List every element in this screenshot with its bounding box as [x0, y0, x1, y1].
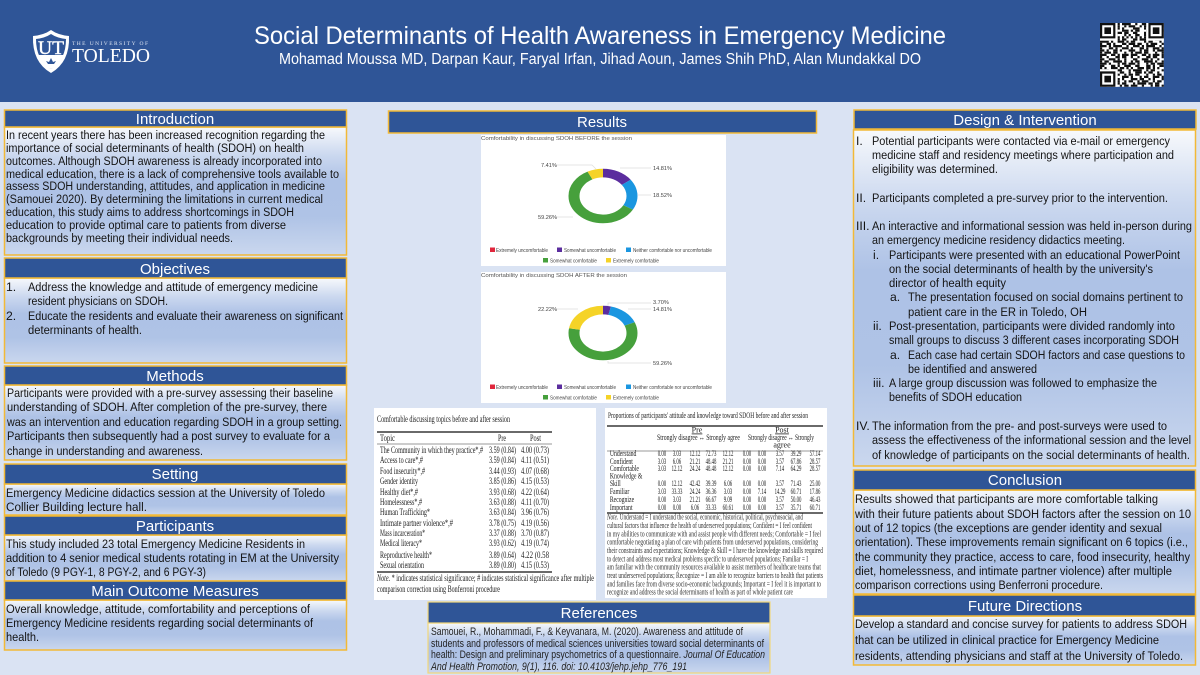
heading: references: References	[561, 605, 637, 622]
text: design and intervention: I.	[856, 134, 863, 148]
table: attitude and knowledge proportions: 36.36	[706, 488, 717, 496]
table: attitude and knowledge proportions: 28.57	[810, 465, 821, 473]
table: comfortable discussing topics: The Community in which they practice*,#	[380, 446, 483, 456]
table: attitude and knowledge proportions: Skill	[610, 479, 621, 488]
text: design and intervention: a.	[890, 290, 900, 304]
table: comfortable discussing topics: Healthy diet*,#	[380, 488, 418, 498]
table: comfortable discussing topics: 3.85 (0.86)	[489, 476, 516, 487]
table: comfortable discussing topics: 3.63 (0.84)	[489, 507, 516, 518]
chart: comfortability after session	[481, 272, 726, 403]
text: introduction	[6, 128, 339, 245]
table: attitude and knowledge proportions: Important	[610, 503, 633, 512]
table: attitude and knowledge proportions: Strongly disagree ↔ Strongly	[748, 433, 814, 442]
table note: recognize and address the social determinants of health as part of whole patient care	[607, 588, 793, 596]
text: conclusion: diet, homelessness, and intimate partner violence) after multiple	[855, 564, 1172, 578]
table: attitude and knowledge proportions: Confident	[610, 457, 633, 466]
table: comfortable discussing topics: Access to care*,#	[380, 456, 423, 466]
text: participants: This study included 23 total Emergency Medicine Residents in	[6, 537, 305, 551]
table: attitude and knowledge proportions: 0.00	[673, 504, 682, 512]
legend: before: Somewhat comfortable	[550, 258, 597, 264]
table: attitude and knowledge proportions: 12.12	[723, 465, 733, 473]
table: comfortable discussing topics: 3.63 (0.88)	[489, 497, 516, 508]
heading: setting: Setting	[152, 466, 198, 483]
text: design and intervention: benefits of SDOH education	[889, 390, 1022, 404]
text: design and intervention: director of health equity	[889, 276, 1007, 290]
table: attitude and knowledge proportions: 21.21	[690, 458, 700, 466]
table: comfortable discussing topics: Post	[530, 434, 541, 444]
heading: future directions: Future Directions	[968, 598, 1082, 615]
table: attitude and knowledge proportions: 0.00	[743, 450, 752, 458]
table note: comfortable negotiating a plan of care with patients from underserved populations, considering	[607, 538, 818, 546]
table: attitude and knowledge proportions: 60.61	[723, 504, 733, 512]
heading: conclusion: Conclusion	[988, 472, 1062, 489]
text: introduction: (Samouei 2020). By determining the limitations in current medical	[6, 192, 323, 206]
text: introduction: education to provide optimal care to patients from diverse	[6, 218, 286, 232]
chart: comfortability after session: Comfortability in discussing SDOH AFTER the session	[481, 273, 627, 279]
table: attitude and knowledge proportions: Understand	[610, 449, 637, 458]
table: attitude and knowledge proportions: 12.12	[672, 465, 682, 473]
text: design and intervention: be identified and answered	[908, 362, 1037, 376]
text: objectives: 1.	[6, 280, 16, 294]
table: comfortable discussing topics: Homelessness*,#	[380, 498, 422, 508]
legend: before: Somewhat uncomfortable	[564, 248, 616, 254]
heading: conclusion	[854, 470, 1196, 490]
donut chart: before	[574, 173, 632, 219]
table: attitude and knowledge proportions: 48.48	[706, 465, 717, 473]
table: comfortable discussing topics: 4.11 (0.51)	[521, 455, 549, 466]
chart: comfortability before session: 14.81%	[653, 166, 672, 172]
chart: comfortability before session: 18.52%	[653, 193, 672, 199]
table: attitude and knowledge proportions: 6.06	[673, 458, 682, 466]
table: comfortable discussing topics: 4.19 (0.74)	[521, 538, 549, 549]
chart: comfortability after session: 14.81%	[653, 307, 672, 313]
header banner	[0, 0, 1200, 102]
legend: after: Extremely uncomfortable	[496, 385, 548, 391]
text: introduction: assess SDOH understanding, attitudes, and application in medicine	[6, 179, 325, 193]
table: attitude and knowledge proportions: 3.03	[724, 488, 733, 496]
table: attitude and knowledge proportions: 0.00	[758, 480, 767, 488]
table: comfortable discussing topics: 3.89 (0.80)	[489, 560, 516, 571]
table note: treat underserved populations; Recognize = I am able to recognize barriers to health that patients	[607, 571, 823, 580]
panel: setting	[4, 464, 346, 515]
text: future directions	[855, 617, 1187, 663]
table: attitude and knowledge proportions: Pre	[692, 426, 703, 434]
table: attitude and knowledge proportions: 67.86	[791, 458, 802, 466]
table: attitude and knowledge proportions: 48.48	[706, 458, 717, 466]
table: comfortable discussing topics: 4.07 (0.68)	[521, 466, 549, 477]
text: main outcome measures: health.	[6, 630, 39, 644]
legend: before: Extremely comfortable	[613, 258, 659, 264]
heading: results	[388, 111, 816, 133]
text: design and intervention: iii.	[873, 376, 885, 390]
text: design and intervention: IV.	[856, 419, 870, 433]
table: attitude and knowledge proportions: 42.42	[690, 480, 700, 488]
panel: conclusion	[854, 470, 1196, 594]
table: attitude and knowledge proportions: 24.24	[690, 488, 701, 496]
table: attitude and knowledge proportions: 50.00	[791, 496, 802, 504]
table: comfortable discussing topics: 3.93 (0.68)	[489, 487, 516, 498]
legend: after	[490, 384, 712, 402]
text: objectives	[6, 280, 344, 337]
table note: their constraints and expectations; Knowledge & Skill = I have the knowledge and skills required	[607, 546, 823, 555]
donut chart: after	[574, 310, 632, 356]
table: comfortable discussing topics: 3.78 (0.75)	[489, 518, 516, 529]
table: comfortable discussing topics: 4.22 (0.64)	[521, 487, 549, 498]
table note: am familiar with the community resources available to assist members of healthcare teams that	[607, 562, 822, 572]
panel: objectives	[4, 258, 346, 363]
table: comfortable discussing topics: Comfortable discussing topics before and after session	[377, 414, 510, 425]
text: participants: addition to 4 senior medical students rotating in EM at the University	[6, 551, 340, 565]
table: attitude and knowledge proportions: 12.12	[690, 450, 700, 458]
table: attitude and knowledge proportions: 3.03	[658, 465, 667, 473]
table: attitude and knowledge proportions: 0.00	[658, 450, 667, 458]
table: attitude and knowledge proportions: 7.14	[758, 488, 767, 496]
table: attitude and knowledge proportions: 39.29	[791, 450, 802, 458]
table: attitude and knowledge proportions: 17.86	[810, 488, 821, 496]
panel: methods	[4, 366, 346, 460]
text: references: Samouei, R., Mohammadi, F., & Keyvanara, M. (2020). Awareness and attitude of	[431, 626, 743, 638]
text: design and intervention: i.	[873, 248, 879, 262]
table: attitude and knowledge proportions: 64.29	[791, 465, 802, 473]
heading: design and intervention: Design & Intervention	[953, 112, 1097, 129]
table: attitude and knowledge proportions: 39.39	[706, 480, 717, 488]
table: attitude and knowledge proportions: 3.57	[776, 496, 785, 504]
text: objectives: determinants of health.	[28, 323, 142, 337]
table: attitude and knowledge proportions: Familiar	[610, 487, 630, 496]
table: attitude and knowledge proportions: Post	[775, 426, 790, 434]
table: attitude and knowledge proportions: 0.00	[743, 458, 752, 466]
text: introduction: outcomes. Although SDOH awareness is already incorporated into	[6, 154, 322, 168]
table: attitude and knowledge proportions: 14.29	[775, 488, 786, 496]
text: references	[430, 626, 765, 673]
table: attitude and knowledge proportions: 33.33	[672, 488, 683, 496]
table: attitude and knowledge proportions: 46.43	[810, 496, 821, 504]
text: design and intervention: III.	[856, 219, 870, 233]
legend: after: Neither comfortable nor uncomfortable	[633, 385, 712, 391]
text: conclusion	[854, 492, 1191, 592]
text: references: health: Design and preliminary psychometrics of a questionnaire. Journal Of Education	[431, 649, 765, 661]
table: attitude and knowledge proportions: Proportions of participants' attitude and knowledge toward SDOH before and after session	[608, 411, 808, 420]
table: attitude and knowledge proportions: 12.12	[723, 450, 733, 458]
table: attitude and knowledge proportions: 3.57	[776, 480, 785, 488]
table: comfortable discussing topics: Topic	[380, 434, 395, 444]
table: attitude and knowledge proportions: 0.00	[743, 496, 752, 504]
heading: future directions	[854, 595, 1196, 616]
text: future directions: that can be utilized in clinical practice for Emergency Medicine	[855, 633, 1159, 647]
text: methods: change in understanding and awareness.	[7, 444, 203, 458]
table: comfortable discussing topics: 4.22 (0.58	[521, 550, 549, 561]
logo: University of Toledo: UT	[38, 38, 64, 59]
text: conclusion: Results showed that participants are more comfortable talking	[855, 492, 1158, 506]
logo: University of Toledo	[33, 30, 150, 73]
table: attitude and knowledge proportions: 3.57	[776, 450, 785, 458]
text: design and intervention: medicine staff and residency meetings where participation and	[872, 148, 1174, 162]
table note: and families face from diverse socio-economic backgrounds; Important = I feel it is important to	[607, 580, 821, 588]
table: attitude and knowledge proportions: Knowledge &	[610, 472, 643, 481]
table: comfortable discussing topics: 4.15 (0.53)	[521, 476, 549, 487]
legend: before: Neither comfortable nor uncomfortable	[633, 248, 712, 254]
table: comfortable discussing topics: Medical literacy*	[380, 539, 422, 549]
table: attitude and knowledge proportions: 0.00	[658, 504, 667, 512]
logo: University of Toledo: THE UNIVERSITY OF	[72, 41, 148, 47]
table: attitude and knowledge proportions: 0.00	[658, 496, 667, 504]
table: attitude and knowledge proportions: 3.57	[776, 504, 785, 512]
table: attitude and knowledge proportions: 0.00	[758, 496, 767, 504]
chart: comfortability after session: 59.26%	[653, 361, 672, 367]
table: attitude and knowledge proportions: 6.06	[724, 480, 733, 488]
table: attitude and knowledge proportions: agree	[773, 440, 791, 450]
table: attitude and knowledge proportions: 0.00	[758, 465, 767, 473]
table: attitude and knowledge proportions: 0.00	[743, 488, 752, 496]
table: attitude and knowledge proportions: Comfortable	[610, 464, 639, 473]
text: participants: of Toledo (9 PGY-1, 8 PGY-2, and 6 PGY-3)	[6, 565, 206, 579]
text: design and intervention: ii.	[873, 319, 882, 333]
chart: comfortability before session	[481, 135, 726, 266]
table note: Note. Understand = I understand the social, economic, historical, political, psychosocial, and	[606, 512, 803, 522]
legend: before: Extremely uncomfortable	[496, 248, 548, 254]
table: attitude and knowledge proportions: 25.00	[810, 480, 821, 488]
table: attitude and knowledge proportions: Recognize	[610, 495, 634, 504]
heading: methods	[4, 366, 346, 385]
table: attitude and knowledge proportions: 12.12	[672, 480, 682, 488]
heading: participants: Participants	[136, 518, 214, 535]
text: setting: Emergency Medicine didactics session at the University of Toledo	[6, 486, 325, 500]
text: design and intervention: The information from the pre- and post-surveys were used to	[872, 419, 1167, 433]
table: attitude and knowledge proportions: 35.71	[791, 504, 801, 512]
panel: references	[428, 602, 770, 673]
text: objectives: Address the knowledge and attitude of emergency medicine	[28, 280, 318, 294]
table: attitude and knowledge proportions: 3.03	[673, 496, 682, 504]
logo: University of Toledo: TOLEDO	[72, 45, 150, 67]
table: comfortable discussing topics: 4.00 (0.73)	[521, 445, 549, 456]
table: comfortable discussing topics: Pre	[498, 434, 506, 444]
table: comfortable discussing topics: Human Trafficking*	[380, 507, 430, 518]
panel: design and intervention	[854, 110, 1196, 466]
text: design and intervention: eligibility was determined.	[872, 162, 998, 176]
chart: comfortability before session: 59.26%	[538, 215, 557, 221]
table: attitude and knowledge proportions: 0.00	[758, 504, 767, 512]
table: comfortable discussing topics: Gender identity	[380, 477, 418, 487]
table: comfortable discussing topics: Sexual orientation	[380, 561, 424, 571]
table note	[606, 512, 823, 596]
table: attitude and knowledge proportions: 3.03	[673, 450, 682, 458]
text: design and intervention: Potential participants were contacted via e-mail or emergency	[872, 134, 1171, 148]
text: main outcome measures: Overall knowledge, attitude, comfortability and perceptions of	[6, 602, 311, 616]
table: attitude and knowledge proportions: 60.71	[810, 504, 820, 512]
text: design and intervention	[856, 134, 1192, 462]
table: comfortable discussing topics: Note. * indicates statistical significance; # indicates statistical significance after multiple	[376, 573, 594, 584]
table: attitude and knowledge proportions: Strongly disagree ↔ Strongly agree	[657, 433, 740, 442]
panel: introduction	[4, 110, 346, 255]
heading: objectives: Objectives	[140, 261, 210, 278]
table: comfortable discussing topics: Mass incarceration*	[380, 529, 425, 539]
table: attitude and knowledge proportions: 7.14	[776, 465, 785, 473]
table: comfortable discussing topics: 3.37 (0.88)	[489, 528, 516, 539]
table: attitude and knowledge proportions: 0.00	[758, 458, 767, 466]
text: objectives: 2.	[6, 309, 16, 323]
table: attitude and knowledge proportions: 66.67	[706, 496, 717, 504]
text: introduction: medical education, there is a lack of comprehensive tools available to	[6, 167, 339, 181]
table: attitude and knowledge proportions: 0.00	[758, 450, 767, 458]
text: introduction: In recent years there has been increased recognition regarding the	[6, 128, 325, 142]
text: references: students and professors of medical sciences universities toward social determinants of	[431, 638, 764, 650]
legend: before	[490, 248, 712, 264]
text: references: And Health Promotion, 9(1), 116. doi: 10.4103/jehp.jehp_776_191	[430, 661, 687, 673]
table: comfortable discussing topics: Intimate partner violence*,#	[380, 519, 453, 529]
table: comfortable discussing topics: 4.11 (0.70)	[521, 497, 549, 508]
text: setting	[6, 486, 325, 514]
table: attitude and knowledge proportions: 57.14	[810, 450, 821, 458]
table: attitude and knowledge proportions: 72.73	[706, 450, 717, 458]
table: comfortable discussing topics: 3.96 (0.76)	[521, 507, 549, 518]
text: methods: Participants then subsequently had a post survey to evaluate for a	[7, 429, 330, 443]
heading: results: Results	[577, 114, 627, 131]
heading: methods: Methods	[146, 368, 204, 385]
table: attitude and knowledge proportions: 33.33	[706, 504, 717, 512]
chart: comfortability before session: 7.41%	[541, 163, 557, 169]
authors: Mohamad Moussa MD, Darpan Kaur, Faryal Irfan, Jihad Aoun, James Shih PhD, Alan Mundakkal DO	[279, 51, 921, 68]
table: comfortable discussing topics: 4.15 (0.53)	[521, 560, 549, 571]
table: attitude and knowledge proportions: 0.00	[743, 465, 752, 473]
table: attitude and knowledge proportions: 21.21	[723, 458, 733, 466]
table: comfortable discussing topics: 3.59 (0.84)	[489, 455, 516, 466]
text: participants	[6, 537, 340, 579]
text: design and intervention: Participants completed a pre-survey prior to the intervention.	[872, 191, 1168, 205]
text: design and intervention: A large group discussion was followed to emphasize the	[889, 376, 1157, 390]
table: comfortable discussing topics: 3.44 (0.93)	[489, 466, 516, 477]
table: attitude and knowledge proportions: 24.24	[690, 465, 701, 473]
table: attitude and knowledge proportions: 21.21	[690, 496, 700, 504]
title: Social Determinants of Health Awareness in Emergency Medicine	[254, 22, 946, 50]
table: attitude and knowledge proportions	[605, 408, 827, 598]
heading: introduction	[4, 110, 346, 128]
text: objectives: resident physicians on SDOH.	[28, 294, 168, 308]
legend: after: Extremely comfortable	[613, 396, 659, 402]
panel: participants	[4, 516, 346, 581]
legend: after: Somewhat comfortable	[550, 396, 597, 402]
heading: main outcome measures: Main Outcome Measures	[91, 583, 259, 600]
text: design and intervention: Post-presentation, participants were divided randomly into	[889, 319, 1175, 333]
table note: cultural factors that influence the health of underserved populations; Confident = I feel confident	[607, 521, 813, 530]
text: objectives: Educate the residents and evaluate their awareness on significant	[28, 309, 344, 323]
heading: objectives	[4, 258, 346, 278]
table note: in my abilities to communicate with and assist people with different needs; Comfortable = I feel	[607, 530, 822, 538]
table: comfortable discussing topics	[374, 408, 596, 600]
text: conclusion: comparison corrections using Benferroni procedure.	[855, 578, 1103, 592]
text: main outcome measures	[6, 602, 314, 644]
text: introduction: education, this study aims to address shortcomings in SDOH	[6, 205, 294, 219]
table: comfortable discussing topics: 3.93 (0.62)	[489, 538, 516, 549]
text: design and intervention: on the social determinants of health by the university's	[889, 262, 1153, 276]
heading: introduction: Introduction	[136, 111, 214, 128]
heading: main outcome measures	[4, 581, 346, 600]
text: design and intervention: II.	[856, 191, 866, 205]
table: attitude and knowledge proportions: 60.71	[791, 488, 801, 496]
QR code	[1100, 23, 1164, 87]
text: setting: Collier Building lecture hall.	[6, 500, 147, 514]
panel: main outcome measures	[4, 581, 346, 650]
text: introduction: importance of social determinants of health (SDOH) on health	[6, 141, 304, 155]
table: comfortable discussing topics: 3.59 (0.84)	[489, 445, 516, 456]
table: comfortable discussing topics: Food insecurity*,#	[380, 467, 425, 477]
table: attitude and knowledge proportions: 3.57	[776, 458, 785, 466]
chart: comfortability after session: 3.70%	[653, 300, 669, 306]
table: comfortable discussing topics: comparison correction using Bonferroni procedure	[377, 584, 500, 595]
heading: references	[428, 602, 770, 623]
text: introduction: backgrounds by meeting their individual needs.	[6, 231, 233, 245]
text: main outcome measures: Emergency Medicine residents regarding social determinants of	[6, 616, 314, 630]
heading: design and intervention	[854, 110, 1196, 129]
text: design and intervention: a.	[890, 348, 900, 362]
table: attitude and knowledge proportions: 71.43	[791, 480, 802, 488]
text: methods: was an intervention and education regarding SDOH in a group setting.	[6, 415, 342, 429]
table: comfortable discussing topics: 3.89 (0.64)	[489, 550, 516, 561]
text: design and intervention: patient care in the ER in Toledo, OH	[908, 305, 1087, 319]
text: methods	[6, 386, 342, 458]
table: attitude and knowledge proportions: 0.00	[743, 504, 752, 512]
table: attitude and knowledge proportions: 0.00	[743, 480, 752, 488]
table note: to detect and address most medical problems specific to underserved populations; Familiar = I	[607, 554, 808, 564]
table: comfortable discussing topics: 3.70 (0.87)	[521, 528, 549, 539]
table: attitude and knowledge proportions: 3.03	[658, 458, 667, 466]
table: attitude and knowledge proportions: 9.09	[724, 496, 733, 504]
text: conclusion: out of 12 topics (the exceptions are gender identity and sexual	[855, 521, 1162, 535]
table: comfortable discussing topics: 4.19 (0.56)	[521, 518, 549, 529]
panel: future directions	[854, 595, 1196, 665]
table: comfortable discussing topics: Reproductive health*	[380, 551, 432, 561]
table: attitude and knowledge proportions: 0.00	[658, 480, 667, 488]
legend: after: Somewhat uncomfortable	[564, 385, 616, 391]
text: design and intervention: an emergency medicine residency didactics meeting.	[872, 233, 1125, 247]
text: methods: understanding of SDOH. After completion of the pre-survey, there	[7, 400, 327, 414]
chart: comfortability after session: 22.22%	[538, 307, 557, 313]
table: attitude and knowledge proportions: 6.06	[691, 504, 700, 512]
chart: comfortability before session: Comfortability in discussing SDOH BEFORE the session	[481, 136, 632, 142]
table: attitude and knowledge proportions: 28.57	[810, 458, 821, 466]
table: attitude and knowledge proportions: 3.03	[658, 488, 667, 496]
text: methods: Participants were provided with a pre-survey assessing their baseline	[7, 386, 333, 400]
heading: setting	[4, 464, 346, 484]
heading: participants	[4, 516, 346, 535]
